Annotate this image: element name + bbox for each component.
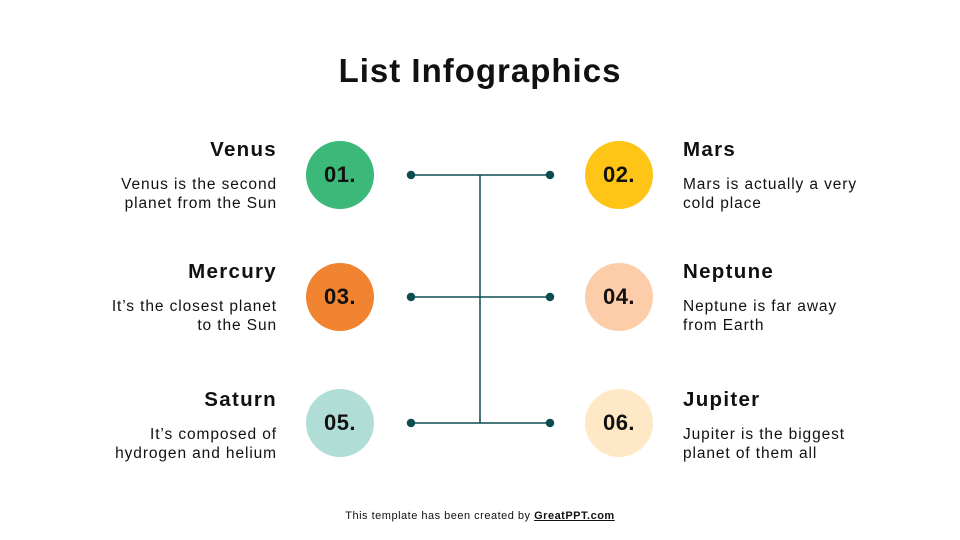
- text: Jupiter: Jupiter is the biggest: [683, 426, 845, 443]
- text: Mercury: Mercury: [188, 260, 277, 283]
- text: Venus: Venus is the second: [121, 176, 277, 193]
- text: Mercury: to the Sun: [197, 317, 277, 334]
- text: Venus: planet from the Sun: [125, 195, 277, 212]
- text: Jupiter: planet of them all: [683, 445, 817, 462]
- circle 06: [585, 389, 653, 457]
- circle 03: 03.: [324, 284, 356, 309]
- circle 02: 02.: [603, 162, 635, 187]
- title: List Infographics: [339, 52, 621, 89]
- text: Neptune: Neptune is far away: [683, 298, 837, 315]
- text: Jupiter: [683, 388, 845, 462]
- footer: This template has been created by GreatPPT.com: [345, 510, 615, 522]
- circle 06: 06.: [603, 410, 635, 435]
- circle 03: [306, 263, 374, 331]
- circle 05: 05.: [324, 410, 356, 435]
- text: Neptune: [683, 260, 837, 334]
- text: Venus: Venus: [210, 138, 277, 161]
- text: Jupiter: Jupiter: [683, 388, 760, 411]
- text: Neptune: from Earth: [683, 317, 764, 334]
- text: Saturn: It’s composed of: [150, 426, 277, 443]
- circle 01: [306, 141, 374, 209]
- text: Venus: [121, 138, 277, 212]
- circle 01: 01.: [324, 162, 356, 187]
- text: Mercury: [112, 260, 277, 334]
- text: Mars: cold place: [683, 195, 762, 212]
- circle 02: [585, 141, 653, 209]
- circle 04: [585, 263, 653, 331]
- text: Neptune: Neptune: [683, 260, 774, 283]
- text: Mars: Mars: [683, 138, 736, 161]
- text: Saturn: [115, 388, 277, 462]
- circle 04: 04.: [603, 284, 635, 309]
- text: Mars: [683, 138, 857, 212]
- text: Saturn: Saturn: [204, 388, 277, 411]
- text: Mars: Mars is actually a very: [683, 176, 857, 193]
- text: Saturn: hydrogen and helium: [115, 445, 277, 462]
- circle 05: [306, 389, 374, 457]
- text: Mercury: It’s the closest planet: [112, 298, 277, 315]
